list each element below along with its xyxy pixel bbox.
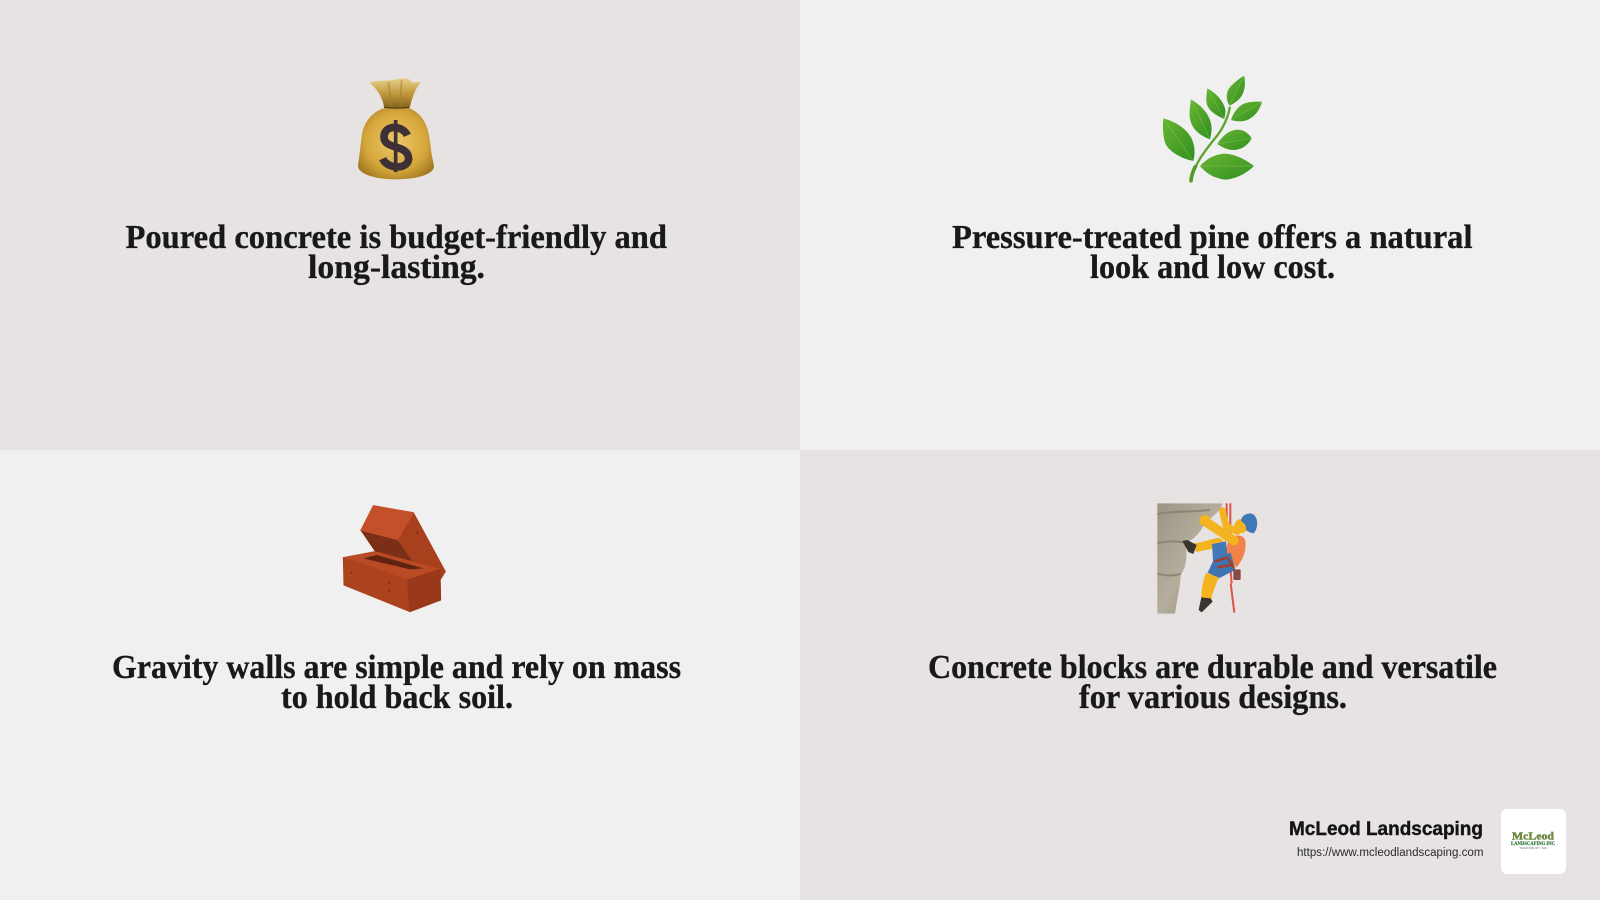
logo bbox=[1501, 809, 1566, 874]
panel: poured concrete bbox=[0, 0, 800, 450]
heading: pressure-treated pine bbox=[952, 219, 1472, 286]
panel: gravity walls bbox=[0, 450, 800, 900]
heading: poured concrete bbox=[126, 219, 667, 286]
icon: money bag bbox=[358, 78, 434, 179]
icon: person climbing bbox=[1157, 503, 1257, 614]
heading: concrete blocks bbox=[928, 649, 1497, 716]
heading: concrete blocks: Concrete blocks are durable and versatile bbox=[928, 649, 1497, 686]
heading: gravity walls: to hold back soil. bbox=[281, 679, 513, 716]
brand url: https://www.mcleodlandscaping.com bbox=[1297, 847, 1484, 859]
heading: gravity walls bbox=[112, 649, 681, 716]
heading: poured concrete: Poured concrete is budget-friendly and bbox=[126, 219, 667, 256]
icon: bricks bbox=[343, 506, 445, 612]
heading: pressure-treated pine: Pressure-treated pine offers a natural bbox=[952, 219, 1472, 256]
heading: pressure-treated pine: look and low cost. bbox=[1090, 249, 1335, 286]
logo: TEWKSBURY, MA bbox=[1519, 847, 1547, 850]
heading: concrete blocks: for various designs. bbox=[1079, 679, 1347, 716]
heading: poured concrete: long-lasting. bbox=[308, 249, 485, 286]
panel: pressure-treated pine bbox=[800, 0, 1600, 450]
icon: herb sprig bbox=[1163, 76, 1262, 181]
logo: McLeod bbox=[1512, 832, 1554, 842]
brand name: McLeod Landscaping bbox=[1289, 818, 1483, 840]
logo: LANDSCAPING INC bbox=[1511, 841, 1555, 847]
heading: gravity walls: Gravity walls are simple and rely on mass bbox=[112, 649, 681, 686]
panel: concrete blocks bbox=[800, 450, 1600, 900]
